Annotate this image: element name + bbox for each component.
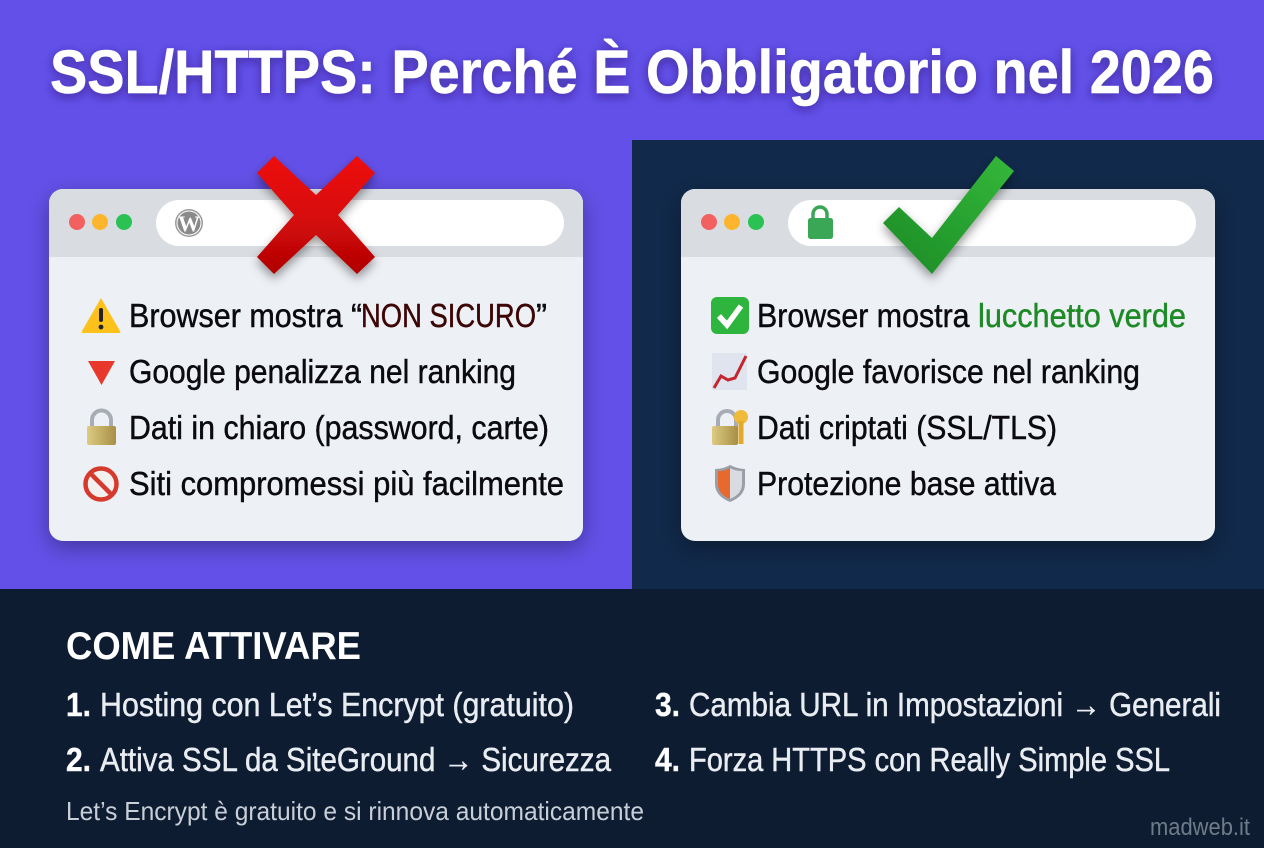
icon: red X [257,156,375,274]
text: non sicuro: NON SICURO [361,297,536,334]
text: green lock: lucchetto verde [978,297,1186,334]
icon: check box [711,297,749,334]
panel: secure side background [632,140,1264,589]
icon: lock and key [712,410,748,445]
step 3: 3. [655,686,680,723]
step 4: Forza HTTPS con Really Simple SSL [689,741,1170,778]
panel: secure browser [681,156,1215,541]
icon: rising chart [712,353,747,390]
step 1: 1. [66,686,91,723]
browser window frame [681,189,1215,541]
text: non sicuro: Browser mostra [129,297,351,334]
icon: green lock [808,207,833,239]
text: non sicuro: ” [536,297,547,334]
browser window frame [49,189,583,541]
icon: green check [883,156,1014,274]
text: ranking boost: Google favorisce nel ranking [757,353,1140,390]
footnote: Let’s Encrypt è gratuito e si rinnova automaticamente [66,796,644,826]
panel: how to activate background [0,589,1264,848]
panel: how to activate [66,625,1250,841]
icon: WordPress logo: W [178,211,200,236]
brand: madweb.it [1150,814,1250,841]
icon: prohibited [86,468,116,500]
address bar [156,200,564,246]
step 1: Hosting con Let’s Encrypt (gratuito) [100,686,574,723]
text: basic protection: Protezione base attiva [757,465,1057,502]
text: compromised sites: Siti compromessi più facilmente [129,465,564,502]
address bar [788,200,1196,246]
text: green lock: Browser mostra [757,297,978,334]
heading: COME ATTIVARE [66,625,361,668]
text: plain data: Dati in chiaro (password, carte) [129,409,549,446]
text: non sicuro: “ [351,297,362,334]
text: encrypted data: Dati criptati (SSL/TLS) [757,409,1057,446]
window dots [701,214,764,230]
panel: insecure browser [49,156,583,541]
icon: warning [82,298,120,333]
icon: shield [715,465,745,502]
icon: red triangle [88,361,115,385]
icon: open padlock [87,410,116,445]
background: purple header [0,0,1264,590]
step 2: 2. [66,741,91,778]
window dots [69,214,132,230]
step 4: 4. [655,741,680,778]
text: ranking penalty: Google penalizza nel ranking [129,353,516,390]
step 2: Attiva SSL da SiteGround → Sicurezza [100,741,612,778]
